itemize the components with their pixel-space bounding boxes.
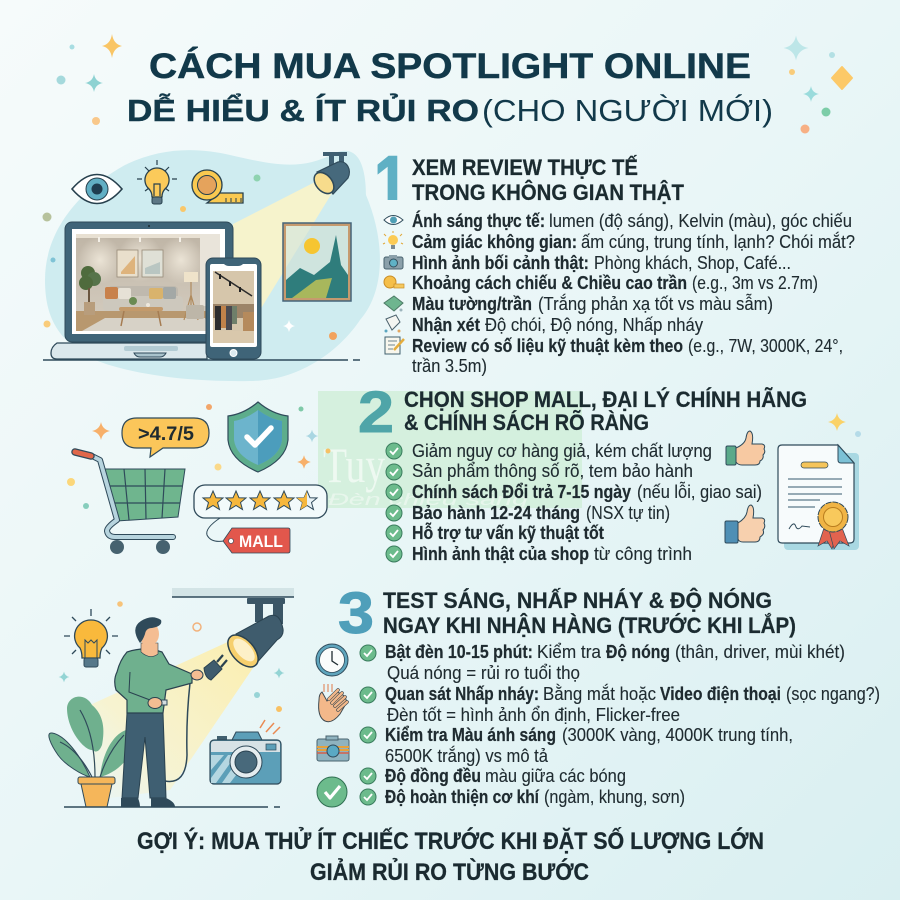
icon: thumbs up blue [725, 505, 765, 543]
camera [210, 720, 281, 784]
MALL tag: MALL [239, 532, 283, 551]
laptop base [51, 343, 207, 359]
step 2 list: Chính sách Đổi trả 7-15 ngày [412, 482, 631, 502]
title: CÁCH MUA SPOTLIGHT ONLINE [149, 46, 751, 86]
shopping cart [75, 452, 185, 554]
star rating box [194, 485, 327, 518]
step 3 list [385, 642, 880, 807]
watermark: Tuy [323, 437, 385, 493]
background blob [45, 150, 380, 381]
bottom tip: GỢI Ý: MUA THỬ ÍT CHIẾC TRƯỚC KHI ĐẶT SỐ LƯỢNG LỚN [137, 826, 764, 855]
step 3 list: Bằng mắt hoặc [543, 683, 656, 704]
step 1 list: Màu tường/trần [412, 294, 532, 314]
icon: hand [319, 684, 347, 722]
step 3 list: (thân, driver, mùi khét) [675, 642, 845, 662]
step 2 list: Hỗ trợ tư vấn kỹ thuật tốt [412, 522, 604, 543]
step 3 list: (3000K vàng, 4000K trung tính, [562, 725, 793, 745]
watermark: Đèn chiếu sáng [328, 490, 529, 509]
title: (CHO NGƯỜI MỚI) [482, 93, 773, 128]
step 2 list: (nếu lỗi, giao sai) [637, 481, 762, 502]
icon: clock [316, 644, 348, 676]
icon: small camera [317, 736, 349, 761]
step number 2: 2 [358, 380, 394, 445]
shield [228, 402, 288, 472]
step 2 list: Giảm nguy cơ hàng giả, kém chất lượng [412, 441, 712, 461]
step 3 heading [383, 588, 796, 638]
step 1 list: Ánh sáng thực tế: [412, 210, 545, 231]
step 1 list: Hình ảnh bối cảnh thật: [412, 253, 589, 273]
icon: light bulb [137, 160, 177, 204]
certificate document [778, 445, 859, 550]
track rail [172, 588, 294, 597]
step 3 list: Quan sát Nhấp nháy: [385, 684, 539, 704]
step 2 heading: CHỌN SHOP MALL, ĐẠI LÝ CHÍNH HÃNG [404, 387, 807, 412]
step 1 list: (Trắng phản xạ tốt vs màu sẫm) [538, 293, 773, 314]
bottom tip [137, 826, 764, 886]
icon: thumbs up green [726, 431, 765, 465]
step 2 list: từ công trình [594, 544, 692, 564]
step number 1: 1 [374, 141, 408, 226]
step 3 list: Video điện thoại [660, 684, 781, 704]
icon: eye [72, 174, 122, 204]
laptop [65, 222, 233, 342]
bottom tip: GIẢM RỦI RO TỪNG BƯỚC [310, 857, 589, 886]
step 3 list: Kiểm tra Màu ánh sáng [385, 725, 556, 745]
step 3 list: Kiểm tra [537, 642, 602, 662]
step 1 heading: TRONG KHÔNG GIAN THẬT [412, 180, 685, 205]
title: DỄ HIỂU & ÍT RỦI RO [127, 92, 479, 128]
ground line [43, 359, 360, 361]
step 3 heading: NGAY KHI NHẬN HÀNG (TRƯỚC KHI LẮP) [383, 613, 796, 638]
icon: measuring tape [192, 170, 243, 203]
step 2 check icons [386, 443, 402, 562]
step 1 list: lumen (độ sáng), Kelvin (màu), góc chiếu [549, 211, 852, 231]
step 1 list: trần 3.5m) [412, 356, 487, 376]
illustration: laptop and phone reviews with spotlight [42, 150, 380, 381]
track spotlight [222, 598, 285, 672]
panel: step 1 [374, 141, 855, 376]
phone [206, 258, 261, 359]
step 1 list: Phòng khách, Shop, Café... [594, 253, 791, 273]
ground line [64, 806, 280, 808]
wall painting [282, 222, 352, 302]
person holding a plug [115, 617, 203, 807]
illustration: trusted shop [67, 402, 330, 554]
illustration: person testing the spotlight [49, 588, 349, 807]
step 1 list: (e.g., 3m vs 2.7m) [692, 273, 818, 293]
step 1 list: Review có số liệu kỹ thuật kèm theo [412, 336, 683, 356]
beam of light [233, 182, 332, 310]
sparkle and dot [828, 413, 861, 437]
step 3 list: Độ hoàn thiện cơ khí [385, 787, 540, 807]
step 2 list: Hình ảnh thật của shop [412, 544, 589, 564]
step 1 heading: XEM REVIEW THỰC TẾ [412, 155, 638, 180]
header decorations [56, 34, 852, 134]
icon: bulb [64, 609, 118, 667]
step 3 check icons [360, 645, 376, 805]
icon: check badge [317, 777, 347, 807]
panel: step 2 [358, 380, 861, 564]
step 2 list: Bảo hành 12-24 tháng [412, 503, 580, 523]
step 2 list [412, 441, 762, 564]
step 1 list: ấm cúng, trung tính, lạnh? Chói mắt? [581, 231, 855, 252]
step number 3: 3 [338, 581, 374, 646]
step 3 list: Quá nóng = rủi ro tuổi thọ [387, 663, 580, 683]
rating bubble [122, 418, 209, 457]
step 3 list: Độ đồng đều [385, 766, 481, 786]
step 3 list: Đèn tốt = hình ảnh ổn định, Flicker-free [387, 705, 680, 725]
step 3 list: 6500K trắng) vs mô tả [385, 745, 549, 766]
step 1 list: Cảm giác không gian: [412, 232, 577, 252]
step 2 heading [404, 387, 807, 435]
step 3 list: Độ nóng [606, 642, 670, 662]
panel: step 3 [338, 581, 880, 807]
step 1 list: Nhận xét [412, 315, 480, 335]
step 1 heading [412, 155, 685, 205]
step 3 heading: TEST SÁNG, NHẤP NHÁY & ĐỘ NÓNG [383, 588, 772, 613]
sparkles and dots [67, 404, 330, 509]
rating bubble: >4.7/5 [138, 424, 194, 445]
step 1 list: (e.g., 7W, 3000K, 24°, [688, 336, 843, 356]
spotlight fixture [310, 152, 349, 197]
step 1 list: Khoảng cách chiếu & Chiều cao trần [412, 273, 687, 293]
step 2 list: Sản phẩm thông số rõ, tem bảo hành [412, 461, 693, 481]
plant [49, 697, 126, 807]
step 3 list: (ngàm, khung, sơn) [544, 787, 685, 807]
step 1 list: Độ chói, Độ nóng, Nhấp nháy [485, 315, 703, 335]
step 3 list: Bật đèn 10-15 phút: [385, 642, 533, 662]
step 3 list: (sọc ngang?) [786, 684, 880, 704]
watermark [318, 391, 582, 509]
light beam [90, 640, 255, 800]
plug and cord [165, 655, 227, 781]
step 3 list: màu giữa các bóng [485, 766, 626, 786]
MALL tag [207, 518, 290, 553]
title [127, 46, 773, 128]
step 1 list [412, 210, 855, 376]
decorative dots [42, 174, 337, 340]
sparkles and dots [59, 601, 284, 712]
step 2 list: (NSX tự tin) [586, 503, 670, 523]
step 1 icons [383, 216, 404, 354]
step 2 heading: & CHÍNH SÁCH RÕ RÀNG [404, 410, 649, 435]
